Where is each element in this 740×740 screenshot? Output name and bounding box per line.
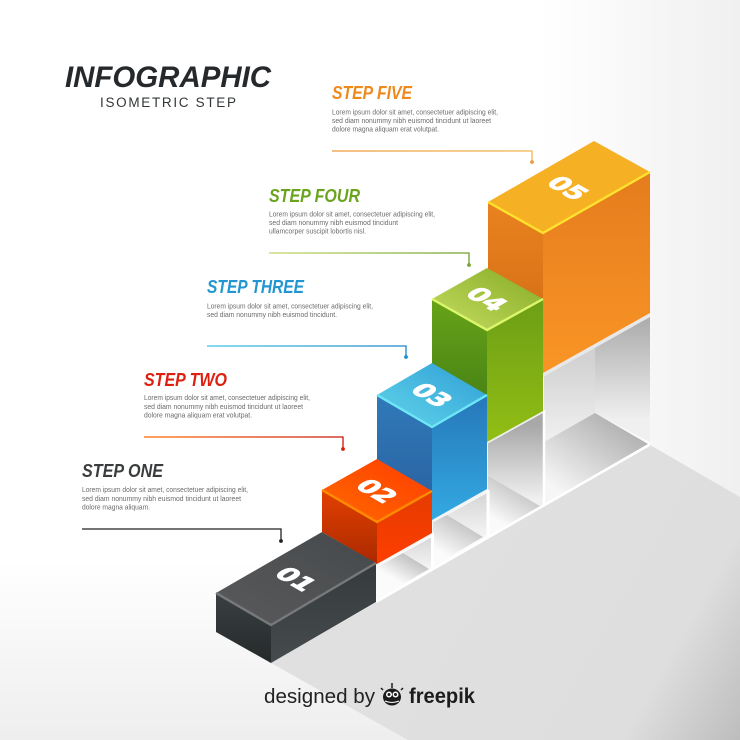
step five text: sed diam nonummy nibh euismod tincidunt ut laoreet (332, 118, 491, 125)
step three text: Lorem ipsum dolor sit amet, consectetuer adipiscing elit, (207, 304, 373, 310)
step 02 block (322, 459, 432, 564)
step five text: Lorem ipsum dolor sit amet, consectetuer adipiscing elit, (332, 110, 498, 116)
step 01 block (216, 532, 376, 663)
step four text: sed diam nonummy nibh euismod tincidunt (269, 220, 398, 227)
step two text: sed diam nonummy nibh euismod tincidunt ut laoreet (144, 404, 303, 411)
step one text: sed diam nonummy nibh euismod tincidunt ut laoreet (82, 496, 241, 503)
step one text: dolore magna aliquam. (82, 504, 150, 512)
freepik credit (264, 683, 475, 708)
number 05: 05 (540, 172, 595, 204)
freepik credit: designed by (264, 686, 375, 708)
title (65, 61, 272, 110)
step one leader line (82, 529, 283, 543)
step two text: dolore magna aliquam erat volutpat. (144, 412, 252, 420)
step four text: STEP FOUR (269, 186, 360, 206)
shelf under the steps (376, 312, 650, 602)
step one text: Lorem ipsum dolor sit amet, consectetuer adipiscing elit, (82, 487, 248, 494)
step two text (144, 370, 310, 420)
subtitle: ISOMETRIC STEP (100, 95, 236, 110)
number 03: 03 (404, 379, 459, 411)
step three text: STEP THREE (207, 277, 305, 297)
step 05 block (488, 141, 650, 373)
step one text (82, 461, 248, 512)
step five leader line (332, 151, 534, 164)
step three leader line (207, 346, 408, 359)
title: INFOGRAPHIC (65, 61, 272, 94)
step five text: dolore magna aliquam erat volutpat. (332, 126, 439, 134)
number 04: 04 (459, 283, 514, 315)
icon: freepik mascot (381, 683, 403, 706)
freepik credit: freepik (409, 685, 475, 708)
step two text: Lorem ipsum dolor sit amet, consectetuer adipiscing elit, (144, 395, 310, 402)
step two leader line (144, 437, 345, 451)
step two text: STEP TWO (144, 370, 227, 390)
step three text (207, 277, 373, 319)
step three text: sed diam nonummy nibh euismod tincidunt. (207, 312, 337, 319)
step four leader line (269, 253, 471, 267)
step five text: STEP FIVE (332, 83, 413, 103)
number 01: 01 (268, 563, 323, 595)
step 03 block (377, 363, 487, 520)
floor shadow (271, 445, 740, 740)
step four text: ullamcorper suscipit lobortis nisl. (269, 228, 366, 236)
step four text (269, 186, 435, 236)
step 04 block (432, 268, 543, 442)
step one text: STEP ONE (82, 461, 164, 481)
step four text: Lorem ipsum dolor sit amet, consectetuer adipiscing elit, (269, 212, 435, 218)
number 02: 02 (349, 475, 404, 507)
step five text (332, 83, 498, 134)
